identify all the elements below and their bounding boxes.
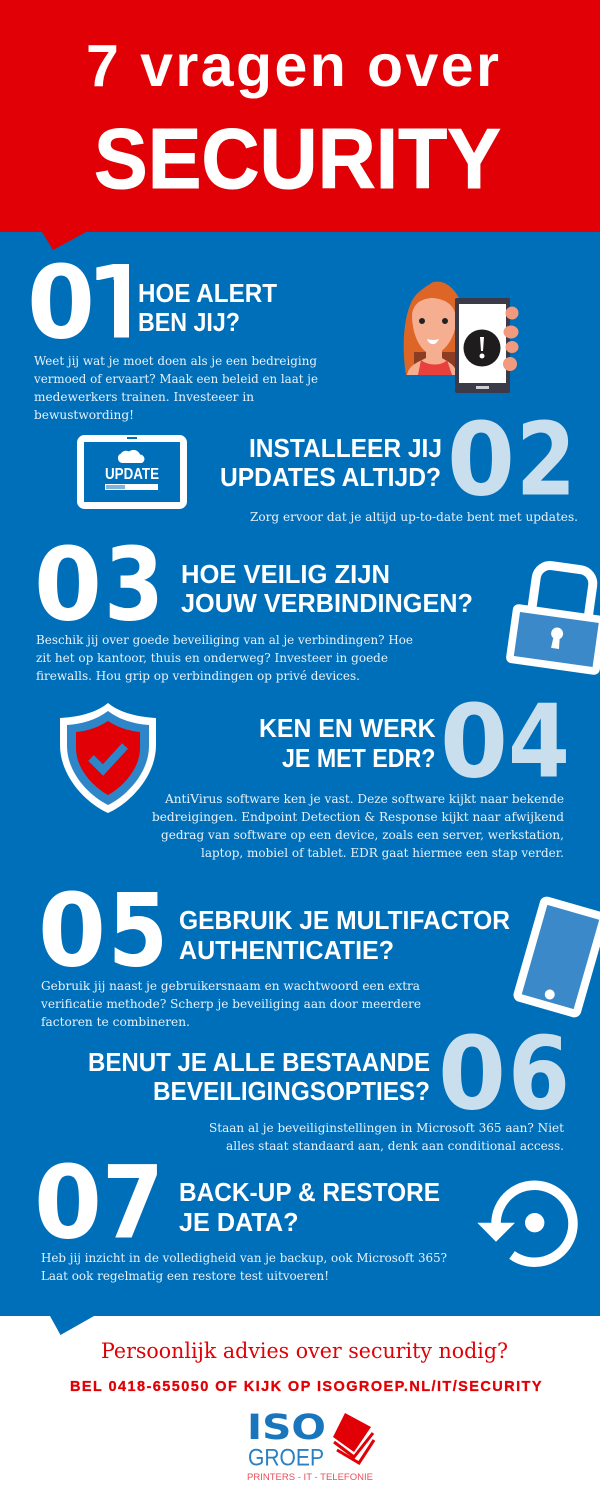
heading 06: BENUT JE ALLE BESTAANDE — [88, 1047, 430, 1077]
number 05: 5 — [108, 872, 168, 990]
icon: woman with phone alert — [404, 282, 518, 393]
heading 01: HOE ALERT — [138, 278, 277, 308]
number 03: 0 — [34, 526, 102, 644]
number 05: 0 — [38, 872, 106, 990]
heading 03 — [181, 559, 473, 618]
title line 1: 7 vragen over — [86, 33, 499, 99]
body text 03: zit het op kantoor, thuis en onderweg? Investeer in goede — [36, 650, 388, 665]
number 04 — [440, 682, 570, 800]
body text 04: AntiVirus software ken je vast. Deze software kijkt naar bekende — [164, 791, 564, 806]
body text 03 — [36, 632, 413, 683]
heading 03: HOE VEILIG ZIJN — [181, 559, 390, 589]
section 02 — [80, 400, 578, 524]
heading 05 — [179, 905, 510, 965]
heading 01 — [138, 278, 277, 337]
heading 02: UPDATES ALTIJD? — [220, 462, 441, 492]
body text 05: factoren te combineren. — [41, 1014, 190, 1029]
body text 05 — [40, 978, 421, 1029]
body text 07: Laat ook regelmatig een restore test uitvoeren! — [41, 1268, 329, 1283]
logo mark: stacked sheets — [333, 1413, 374, 1463]
number 06: 0 — [438, 1014, 506, 1132]
body text 01 — [33, 353, 318, 422]
body text 05: Gebruik jij naast je gebruikersnaam en wachtwoord een extra — [41, 978, 421, 993]
heading 03: JOUW VERBINDINGEN? — [181, 588, 473, 618]
heading 07 — [179, 1177, 440, 1237]
heading 07: JE DATA? — [179, 1207, 298, 1237]
section 04 — [60, 682, 570, 860]
number 07: 7 — [102, 1144, 164, 1262]
body text 05: verificatie methode? Scherp je beveiliging aan door meerdere — [40, 996, 421, 1011]
heading 02: INSTALLEER JIJ — [249, 433, 442, 463]
logo: ISO Groep — [247, 1408, 374, 1483]
number 03 — [34, 526, 164, 644]
heading 06 — [88, 1047, 430, 1106]
panel: red header — [0, 0, 600, 250]
body text 07 — [41, 1250, 447, 1283]
number 05 — [38, 872, 168, 990]
icon: update tablet: UPDATE — [105, 466, 159, 483]
icon: tablet device — [517, 900, 600, 1014]
heading 05: GEBRUIK JE MULTIFACTOR — [179, 905, 510, 935]
body text 01: Weet jij wat je moet doen als je een bedreiging — [34, 353, 317, 368]
logo tagline: PRINTERS - IT - TELEFONIE — [247, 1472, 373, 1483]
body text 07: Heb jij inzicht in de volledigheid van je backup, ook Microsoft 365? — [41, 1250, 447, 1265]
body text 06: alles staat standaard aan, denk aan conditional access. — [226, 1138, 564, 1153]
body text 04: bedreigingen. Endpoint Detection & Response kijkt naar afwijkend — [152, 809, 564, 824]
number 02: 0 — [447, 400, 515, 518]
title line 2: SECURITY — [94, 112, 501, 207]
heading 01: BEN JIJ? — [138, 307, 240, 337]
body text 03: Beschik jij over goede beveiliging van al je verbindingen? Hoe — [36, 632, 413, 647]
panel: blue background — [0, 232, 600, 1335]
heading 04: JE MET EDR? — [282, 743, 436, 773]
footer call to action — [70, 1339, 542, 1395]
heading 04: KEN EN WERK — [259, 713, 436, 743]
body text 01: bewustwording! — [34, 407, 134, 422]
section 01 — [32, 262, 518, 422]
body text 03: firewalls. Hou grip op verbindingen op privé devices. — [36, 668, 360, 683]
number 04: 0 — [440, 682, 508, 800]
body text 04 — [152, 791, 564, 860]
body text 04: gedrag van software op een device, zoals een server, werkstation, — [161, 827, 564, 842]
icon: restore arrow — [477, 1185, 573, 1262]
number 01: 0 — [27, 244, 95, 362]
number 03: 3 — [104, 526, 164, 644]
heading 07: BACK-UP & RESTORE — [179, 1177, 440, 1207]
body text 02: Zorg ervoor dat je altijd up-to-date bent met updates. — [250, 509, 578, 524]
section 07 — [34, 1144, 573, 1283]
number 06 — [438, 1014, 570, 1132]
logo subword: GROEP — [248, 1444, 324, 1472]
number 04: 4 — [508, 682, 570, 800]
CTA contact line: BEL 0418-655050 OF KIJK OP ISOGROEP.NL/IT/SECURITY — [70, 1379, 542, 1395]
number 01: 1 — [85, 244, 155, 362]
number 02: 2 — [516, 400, 576, 518]
heading 02 — [220, 433, 442, 492]
body text 06 — [209, 1120, 564, 1153]
number 02 — [447, 400, 576, 518]
body text 04: laptop, mobiel of tablet. EDR gaat hiermee een stap verder. — [201, 845, 564, 860]
icon: update tablet — [80, 437, 184, 506]
section 05 — [38, 872, 600, 1029]
icon: padlock — [510, 562, 600, 671]
CTA heading: Persoonlijk advies over security nodig? — [101, 1339, 508, 1363]
number 01 — [32, 262, 129, 339]
heading 04 — [259, 713, 436, 773]
heading 05: AUTHENTICATIE? — [179, 935, 394, 965]
number 06: 6 — [508, 1014, 570, 1132]
number 07 — [34, 1144, 164, 1262]
body text 01: vermoed of ervaart? Maak een beleid en laat je — [33, 371, 318, 386]
body text 01: medewerkers trainen. Investeeer in — [34, 389, 254, 404]
body text 06: Staan al je beveiliginstellingen in Microsoft 365 aan? Niet — [209, 1120, 564, 1135]
section 06 — [88, 1014, 570, 1153]
logo wordmark: ISO — [247, 1408, 326, 1448]
number 07: 0 — [34, 1144, 102, 1262]
icon: shield with check — [60, 703, 156, 813]
heading 06: BEVEILIGINGSOPTIES? — [153, 1076, 430, 1106]
section 03 — [34, 526, 600, 683]
